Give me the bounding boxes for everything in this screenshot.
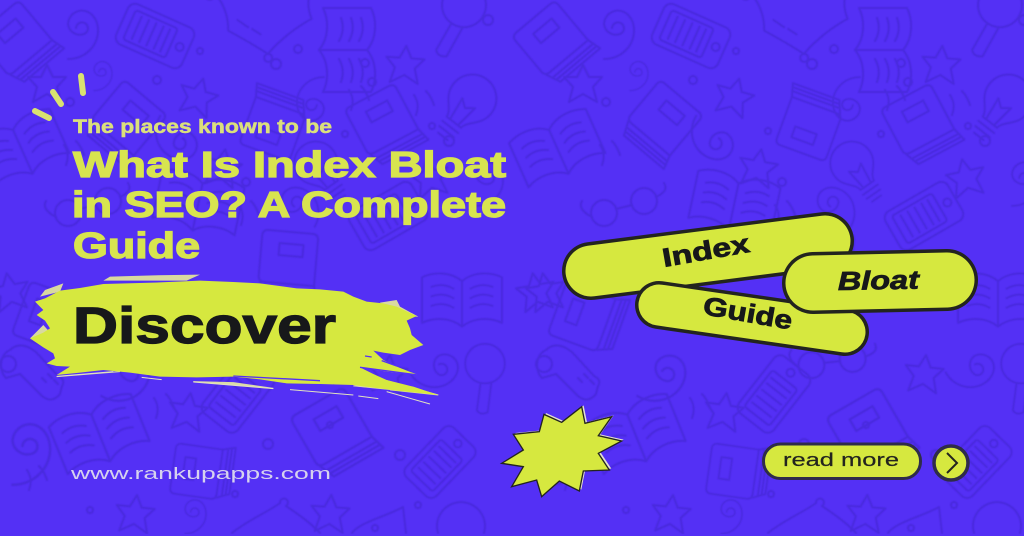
pill: Index: Index	[660, 228, 752, 273]
icon: arrow button	[934, 446, 968, 480]
pill: Guide	[659, 290, 845, 336]
icon: accent rays	[35, 76, 83, 118]
pill: Bloat	[813, 265, 947, 296]
website url: www.rankupapps.com	[69, 464, 331, 483]
brush stroke with Discover label: Discover	[73, 297, 336, 354]
title: in SEO? A Complete	[72, 184, 506, 225]
pill: Index	[591, 228, 825, 273]
button: read more	[764, 444, 920, 478]
pill: Guide: Guide	[701, 290, 795, 336]
title: Guide	[73, 225, 200, 266]
button: read more: read more	[783, 450, 899, 470]
icon: starburst	[502, 405, 624, 497]
title	[72, 144, 506, 266]
pill: Bloat: Bloat	[838, 265, 921, 296]
eyebrow text: The places known to be	[73, 117, 332, 138]
brush stroke with Discover label	[30, 275, 438, 404]
title: What Is Index Bloat	[73, 144, 506, 185]
